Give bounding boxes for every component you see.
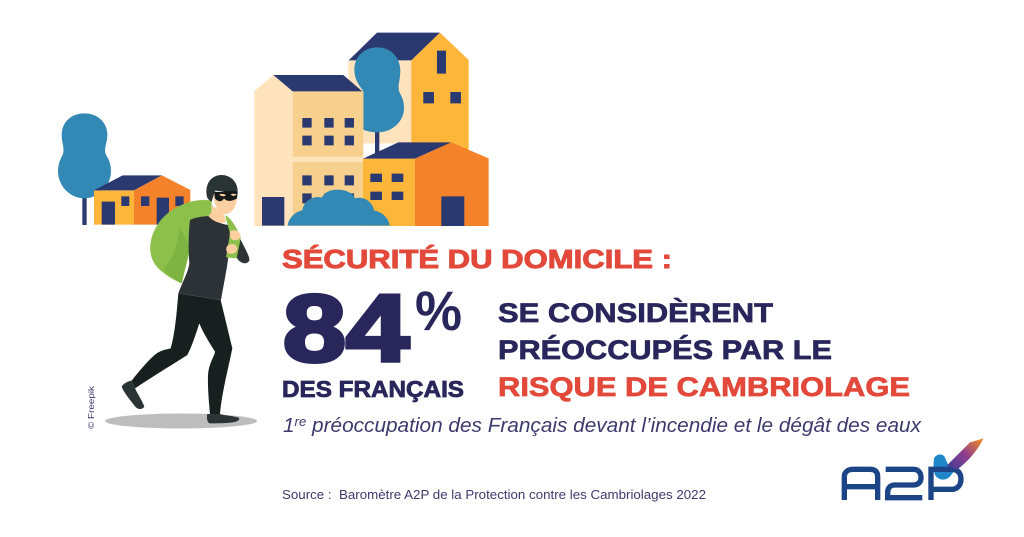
neck [208,205,226,223]
statistic subject: DES FRANÇAIS [282,376,464,402]
sack strap [225,215,241,258]
face [213,193,237,214]
illustration: group of buildings [254,33,489,226]
illustration: burglar with green sack [105,175,257,428]
subtitle: re [295,414,306,429]
hands [226,230,241,254]
mask [214,191,238,201]
ground shadow [105,414,257,428]
statement: RISQUE DE CAMBRIOLAGE [498,372,910,402]
statistic: 84% [283,276,462,382]
statement: SE CONSIDÈRENT [498,297,774,328]
cap [206,175,238,202]
statistic: 84%: % [415,279,462,342]
heading: SÉCURITÉ DU DOMICILE : [282,245,672,274]
statement [498,297,910,402]
statistic: 84%: 84 [283,276,409,382]
logo: A2P [844,438,983,500]
sack [150,200,212,283]
legs and shoes [122,293,239,423]
credit: Freepik: © Freepik [86,385,96,429]
illustration: small house and tree [58,113,190,225]
torso and arms [178,216,249,300]
upper body [150,175,249,300]
source: Source : Baromètre A2P de la Protection contre les Cambriolages 2022 [282,488,706,502]
statement: PRÉOCCUPÉS PAR LE [498,334,832,365]
subtitle: 1 [283,414,294,437]
subtitle: préoccupation des Français devant l’incendie et le dégât des eaux [306,414,922,437]
